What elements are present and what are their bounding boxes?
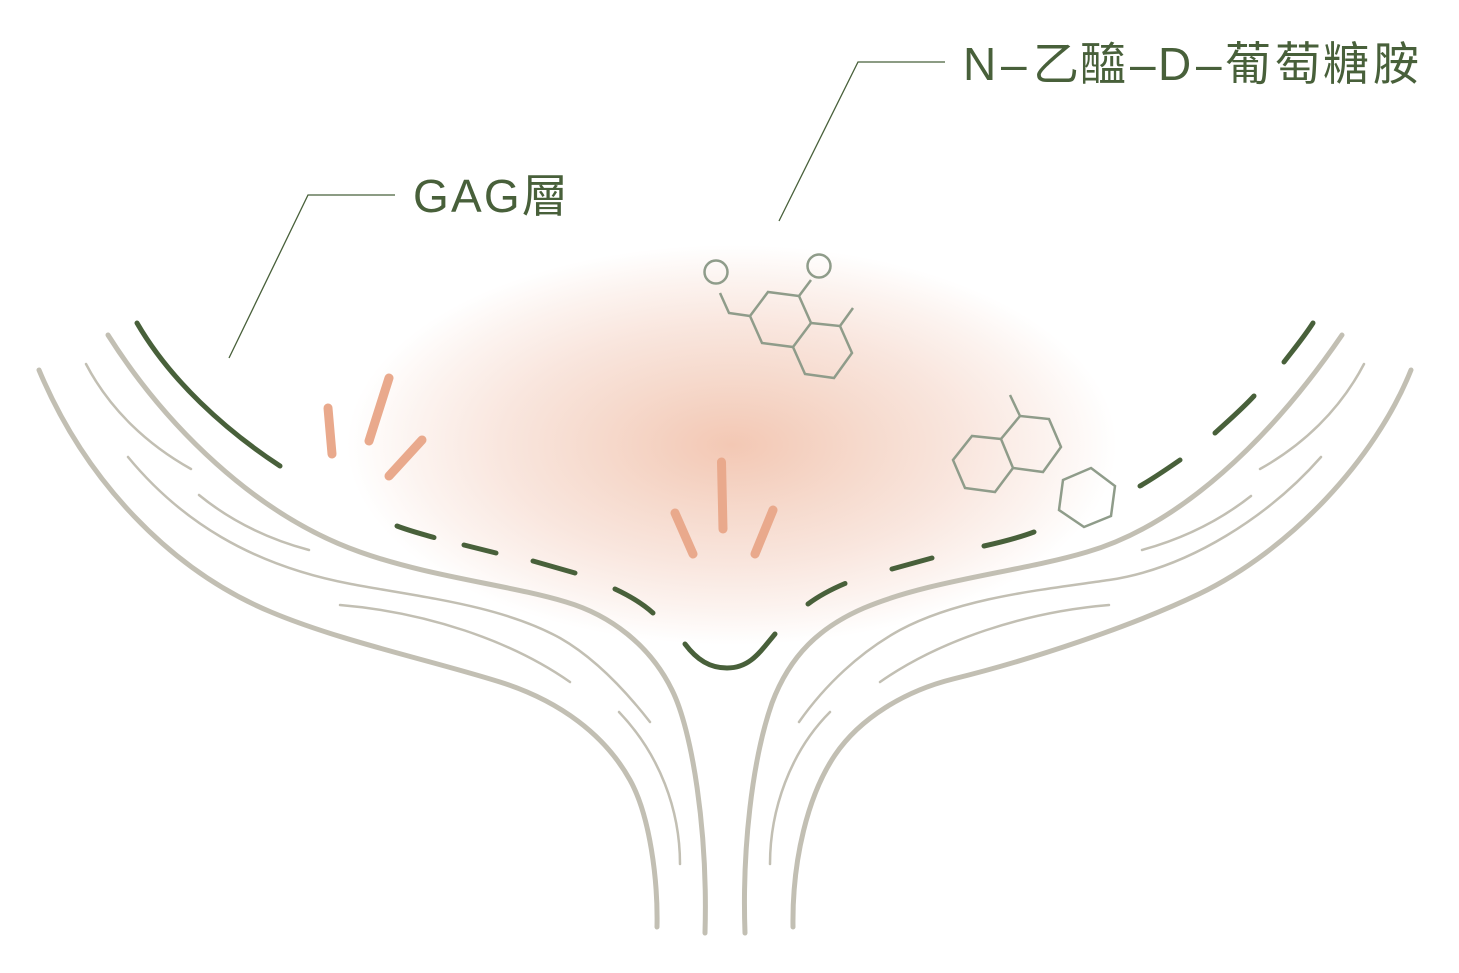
- inflammation glow: [347, 245, 1117, 645]
- GAG layer: [137, 323, 1313, 668]
- N-acetylglucosamine molecules: [704, 254, 1115, 527]
- tissue layers: [39, 335, 1411, 933]
- right tissue thin lines: [770, 364, 1364, 864]
- right tissue thick lines: [744, 335, 1411, 933]
- damage marks: [328, 378, 773, 554]
- label: GAG layer: GAG層: [413, 170, 570, 222]
- leader lines: [229, 62, 945, 358]
- label: N-acetylglucosamine: N–乙醯–D–葡萄糖胺: [963, 38, 1419, 90]
- left tissue thin lines: [86, 364, 680, 864]
- left tissue thick lines: [39, 335, 705, 933]
